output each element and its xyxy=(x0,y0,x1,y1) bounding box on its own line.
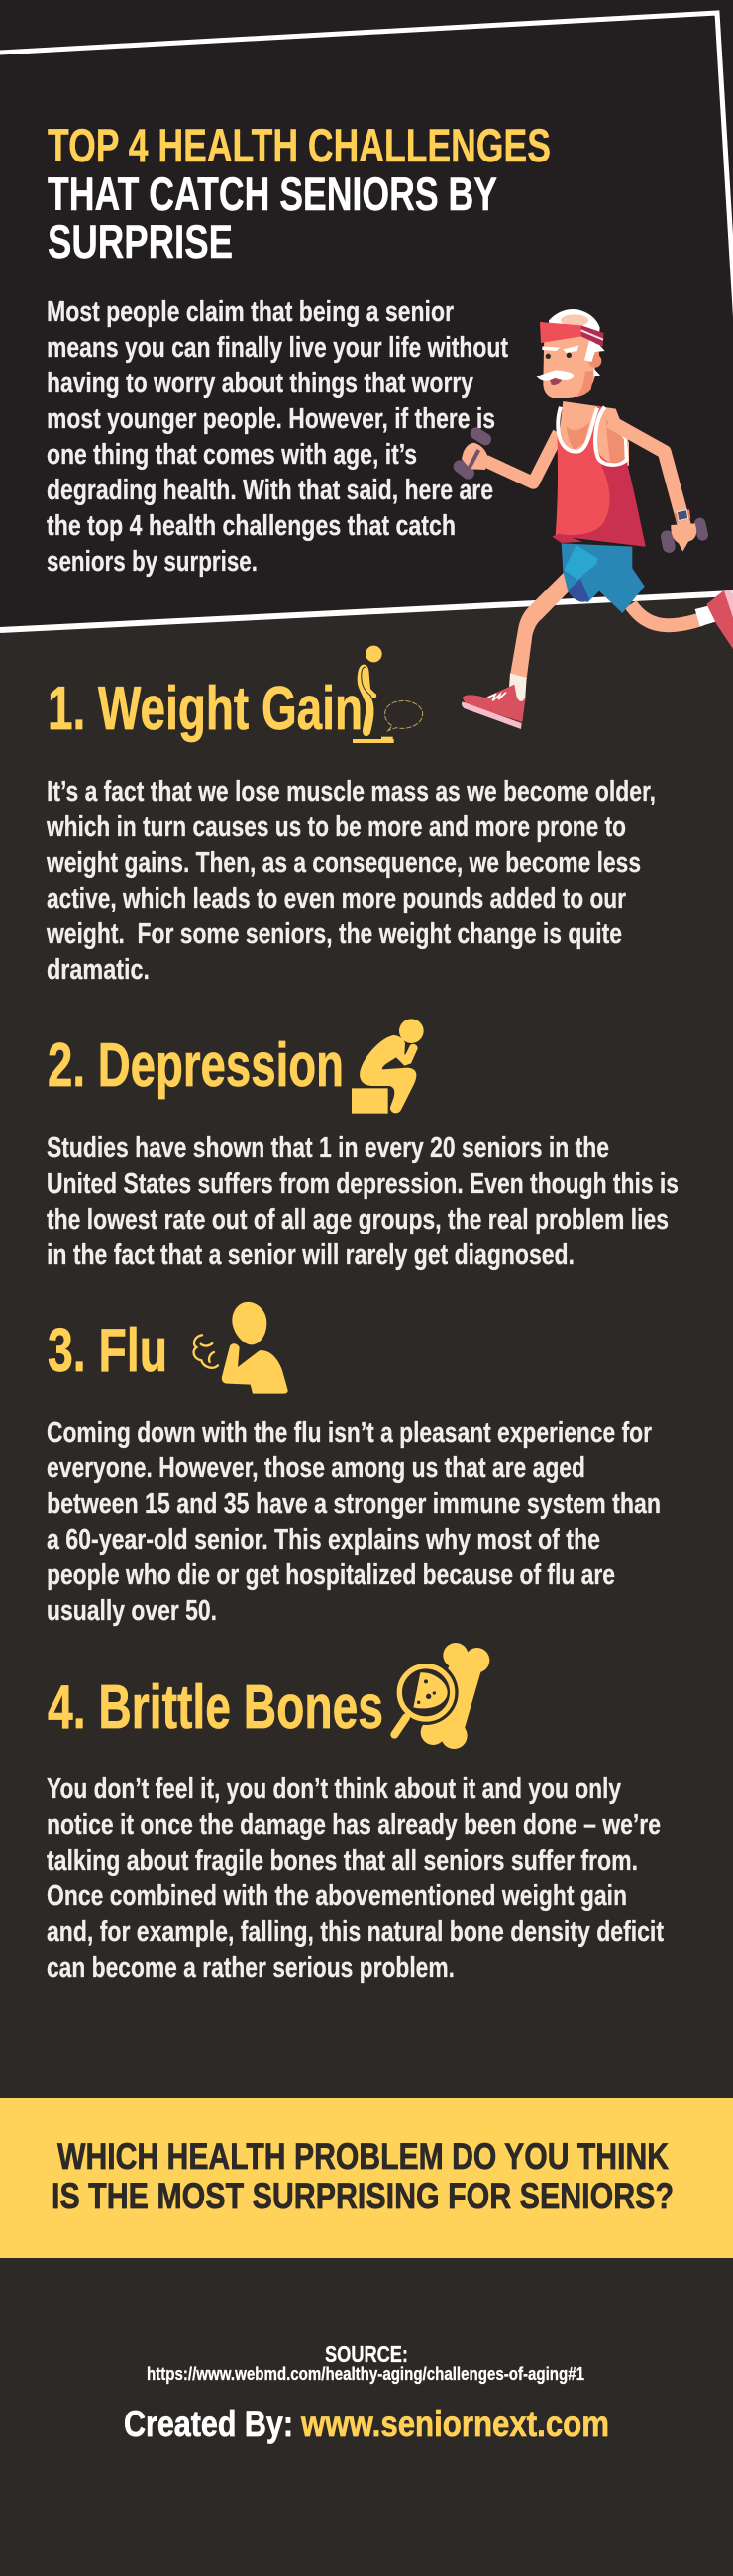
intro paragraph xyxy=(47,296,508,578)
title: THAT CATCH SENIORS BY xyxy=(48,167,497,220)
icon: person on scale with speech bubble xyxy=(353,646,423,743)
text: brittle bones xyxy=(47,1773,664,1984)
text: flu xyxy=(47,1417,661,1627)
text: flu: usually over 50. xyxy=(47,1595,217,1627)
credit line: www.seniornext.com xyxy=(300,2404,609,2444)
front shoe xyxy=(462,673,527,729)
text: depression: in the fact that a senior will rarely get diagnosed. xyxy=(47,1239,575,1271)
heading: 4. Brittle Bones: 4. Brittle Bones xyxy=(48,1673,383,1742)
right arm xyxy=(609,421,685,528)
title: SURPRISE xyxy=(48,215,233,268)
source citation: https://www.webmd.com/healthy-aging/challenges-of-aging#1 xyxy=(147,2364,584,2384)
heading: 2. Depression: 2. Depression xyxy=(48,1031,344,1100)
text: flu: a 60-year-old senior. This explains why most of the xyxy=(47,1524,600,1556)
icon: bone under magnifying glass xyxy=(393,1643,489,1749)
text: depression xyxy=(47,1132,679,1271)
intro paragraph: most younger people. However, if there is xyxy=(47,403,495,435)
panel: question banner xyxy=(0,2098,733,2258)
heading: 3. Flu: 3. Flu xyxy=(48,1317,167,1385)
credit line xyxy=(124,2404,609,2444)
intro paragraph: degrading health. With that said, here are xyxy=(47,475,493,506)
intro paragraph: having to worry about things that worry xyxy=(47,368,473,399)
text: brittle bones: can become a rather serious problem. xyxy=(47,1952,455,1984)
icon: coughing person xyxy=(194,1302,288,1394)
shorts xyxy=(562,543,645,613)
front leg xyxy=(510,568,580,679)
text: flu: everyone. However, those among us that are aged xyxy=(47,1452,585,1484)
tank top xyxy=(552,405,646,547)
left arm xyxy=(485,433,559,483)
intro paragraph: one thing that comes with age, it’s xyxy=(47,439,417,471)
icon: senior runner with dumbbells xyxy=(460,309,733,729)
neck and chest xyxy=(558,401,629,466)
intro paragraph: Most people claim that being a senior xyxy=(47,296,454,328)
intro paragraph: the top 4 health challenges that catch xyxy=(47,510,456,542)
right dumbbell and watch xyxy=(667,509,702,552)
heading: 1. Weight Gain: 1. Weight Gain xyxy=(48,675,363,743)
text: weight gain: dramatic. xyxy=(47,954,150,986)
head xyxy=(537,309,605,398)
left dumbbell xyxy=(460,433,488,473)
intro paragraph: seniors by surprise. xyxy=(47,546,258,578)
panel: intro frame xyxy=(0,0,733,630)
title: TOP 4 HEALTH CHALLENGES xyxy=(48,119,551,171)
credit line: Created By: xyxy=(124,2404,293,2444)
source citation xyxy=(147,2341,584,2384)
source citation: SOURCE: xyxy=(325,2341,408,2367)
rear leg xyxy=(631,604,701,625)
title xyxy=(48,119,551,268)
text: weight gain xyxy=(46,776,656,986)
rear shoe xyxy=(695,590,733,649)
intro paragraph: means you can finally live your life without xyxy=(47,332,508,364)
icon: depressed seated person xyxy=(352,1019,424,1114)
